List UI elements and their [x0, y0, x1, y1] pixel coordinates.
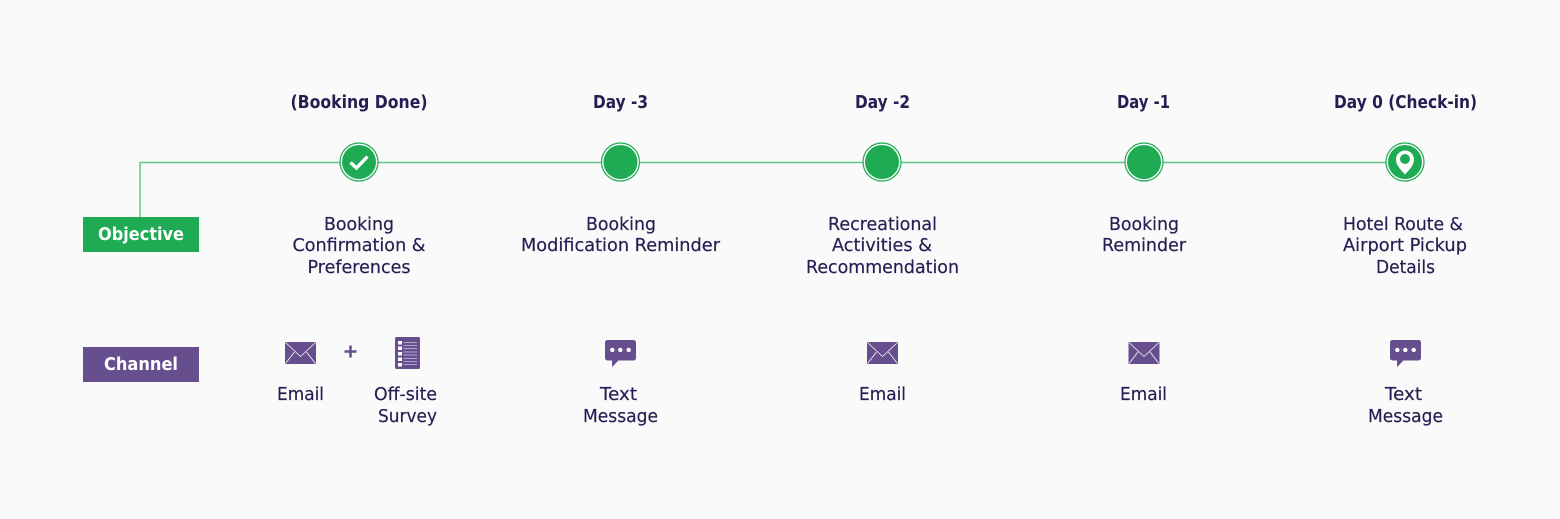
- icon: node: [1125, 143, 1163, 181]
- objective text: [806, 214, 959, 278]
- channel: Email: Email: [859, 384, 906, 405]
- icon: text message: [1390, 340, 1421, 367]
- channel: Text Message: Text: [599, 384, 637, 405]
- channel: Off-site Survey: Off-site: [374, 384, 437, 405]
- objective text: Hotel Route &: [1343, 214, 1463, 235]
- channel: Text Message: [583, 384, 658, 427]
- objective text: Confirmation &: [292, 235, 426, 256]
- objective text: [1102, 214, 1187, 256]
- objective text: Details: [1376, 257, 1435, 278]
- step: Day 0: [1334, 92, 1477, 427]
- objective text: Booking: [324, 214, 394, 235]
- channel: Text Message: Text: [1384, 384, 1422, 405]
- objective text: [521, 214, 721, 256]
- objective text: Booking: [1109, 214, 1179, 235]
- objective text: Recommendation: [806, 257, 959, 278]
- channel: Text Message: Message: [1368, 406, 1443, 427]
- step: Day -1: Day -1: [1117, 92, 1170, 113]
- channel: Off-site Survey: Survey: [378, 406, 437, 427]
- objective text: Modification Reminder: [521, 235, 721, 256]
- channel: Off-site Survey: [374, 384, 437, 427]
- objective text: [292, 214, 426, 278]
- step: Day -2: [806, 92, 959, 405]
- channel: Email: Email: [1120, 384, 1167, 405]
- step: Booking Done: (Booking Done): [290, 92, 428, 113]
- step: Day -2: Day -2: [855, 92, 910, 113]
- objective text: Preferences: [308, 257, 410, 278]
- icon: survey: [395, 337, 420, 369]
- label: Objective: Objective: [98, 224, 184, 245]
- objective text: Reminder: [1102, 235, 1187, 256]
- icon: text message: [605, 340, 636, 367]
- icon: email: [285, 342, 316, 364]
- step: Day -1: [1102, 92, 1187, 405]
- icon: check node: [340, 143, 378, 181]
- label: Objective: [83, 217, 199, 252]
- step: Day -3: [521, 92, 721, 427]
- step: Day 0: Day 0 (Check-in): [1334, 92, 1477, 113]
- icon: email: [1128, 342, 1160, 364]
- step: Booking Done: [277, 92, 437, 427]
- objective text: Airport Pickup: [1343, 235, 1467, 256]
- channel: Text Message: [1368, 384, 1443, 427]
- channel: Text Message: Message: [583, 406, 658, 427]
- icon: node: [863, 143, 901, 181]
- objective text: Recreational: [828, 214, 937, 235]
- icon: email: [867, 342, 898, 364]
- step: Day -3: Day -3: [593, 92, 648, 113]
- channel: Email: Email: [277, 384, 324, 405]
- label: Channel: Channel: [104, 354, 178, 375]
- timeline connector: [140, 162, 1390, 217]
- icon: plus: [344, 346, 356, 358]
- objective text: Booking: [586, 214, 656, 235]
- label: Channel: [83, 347, 199, 382]
- icon: location node: [1386, 143, 1424, 181]
- objective text: [1343, 214, 1467, 278]
- objective text: Activities &: [832, 235, 932, 256]
- icon: node: [602, 143, 640, 181]
